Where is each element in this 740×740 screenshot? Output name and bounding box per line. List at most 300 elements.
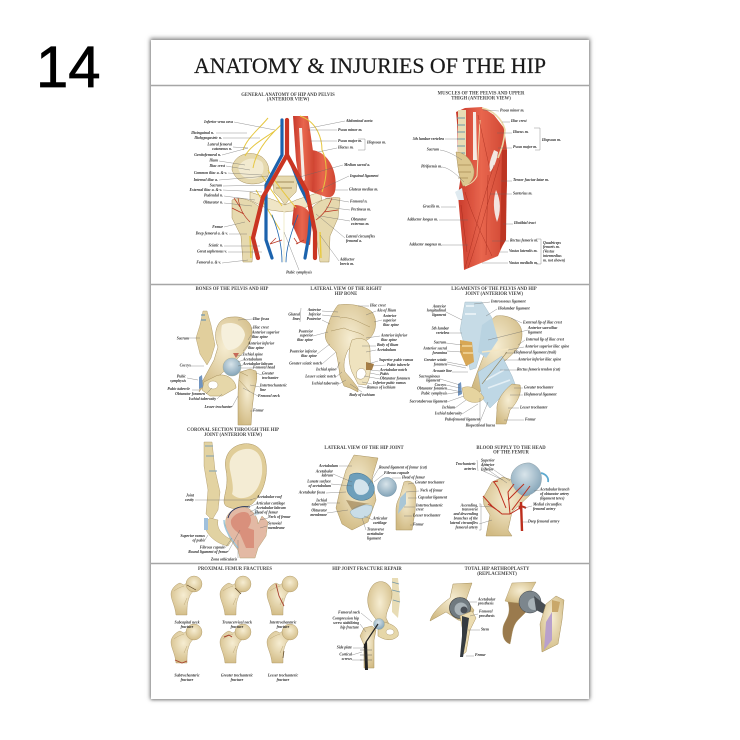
labels: general anatomy left: Femoral a. & v. [196, 260, 221, 264]
illustration: implanted hip prosthesis [430, 583, 476, 657]
leader lines: hip bone [300, 306, 386, 392]
labels: muscles left: Piriformis m. [421, 164, 442, 168]
labels: general anatomy right: Abdominal aorta [345, 119, 373, 123]
labels: fracture types: Greater trochanteric [221, 674, 253, 678]
labels: coronal: Round ligament of femur [188, 550, 229, 554]
labels: blood supply: arteries [464, 467, 477, 471]
heading: blood supply: BLOOD SUPPLY TO THE HEAD [476, 446, 546, 451]
labels: general anatomy left: Ilium [208, 158, 218, 162]
heading: bones: BONES OF THE PELVIS AND HIP [196, 287, 268, 292]
labels: ligaments left: Obturator foramen [417, 386, 447, 390]
labels: hip bone right: iliac spine [383, 323, 399, 327]
labels: lateral view right: Articular [372, 516, 388, 520]
femur: lesser trochanteric fracture [267, 624, 298, 663]
labels: bones right: trochanter [262, 376, 279, 380]
labels: general anatomy right: Pectineus m. [351, 208, 371, 212]
labels: muscles right: m. not shown) [543, 258, 566, 262]
labels: hip bone right: Body of ischium [348, 393, 375, 397]
labels: bones left [167, 336, 233, 409]
labels: lateral view left: Acetabulum [318, 464, 338, 468]
panel: blood supply to the head of the femur [450, 446, 569, 536]
labels: muscles left: 5th lumbar vertebra [413, 137, 444, 141]
labels: general anatomy left: Sciatic n. [208, 244, 223, 248]
labels: fracture types: Transcervical neck [222, 620, 252, 624]
labels: hip bone right: Obturator foramen [380, 376, 410, 380]
labels: muscles right: Iliopsoas m. [541, 138, 561, 142]
labels: bones left: Lesser trochanter [203, 405, 233, 409]
labels: ligaments right: ligament [528, 330, 543, 334]
femur: intertrochanteric fracture [267, 576, 298, 615]
labels: lateral view left: of acetabulum [309, 484, 331, 488]
labels: blood supply: Trochanteric [456, 462, 476, 466]
labels: coronal: membrane [268, 526, 285, 530]
labels: coronal: Head of femur [254, 510, 279, 514]
labels: bones right: iliac spine [252, 335, 268, 339]
labels: bones right: Iliac crest [252, 326, 269, 330]
labels: blood supply: Inferior [480, 468, 494, 472]
labels: muscles right: Iliacus m. [512, 130, 529, 134]
labels: lateral view left: Obturator [311, 508, 328, 512]
labels: lateral view right: Fibrous capsule [384, 471, 410, 475]
labels: general anatomy left: Internal iliac a. [193, 178, 218, 182]
labels: blood supply [450, 458, 569, 530]
labels: ligaments right: Rectus femoris tendon (cut) [517, 368, 561, 372]
labels: blood supply: (ligament teres) [540, 496, 565, 500]
labels: ligaments right: Anterior superior iliac spine [524, 344, 570, 348]
panel: coronal section through the hip joint [180, 428, 291, 562]
labels: ligaments left: Iliopectineal bursa [465, 424, 495, 428]
labels: repair: Side plate [337, 646, 352, 650]
leader lines: ligaments [440, 302, 528, 424]
illustration: pelvis and femur bones [196, 311, 257, 425]
labels: lateral view right: ligament [367, 536, 382, 540]
labels: hip bone left: Posterior inferior [290, 350, 318, 354]
labels: lateral view right: crest [416, 508, 424, 512]
labels: hip bone left: Inferior [308, 312, 322, 316]
leader lines: bones [187, 319, 262, 411]
labels: fracture types: Subcapital neck [174, 620, 200, 624]
panel: general anatomy of hip and pelvis [188, 93, 386, 274]
femur: subcapital neck fracture [171, 576, 202, 615]
labels: ligaments left: Coccyx [435, 383, 446, 387]
labels: hip bone left: Gluteal [288, 312, 301, 316]
labels: general anatomy right: femoral a. [346, 239, 362, 243]
labels: coronal: Synovial [268, 522, 282, 526]
labels: bones right [242, 317, 287, 412]
labels: arthroplasty [475, 598, 496, 657]
labels: hip bone left: Ischial tuberosity [311, 382, 339, 386]
labels: bones right: Acetabulum [242, 358, 262, 362]
labels: hip bone left: iliac spine [297, 338, 313, 342]
labels: hip bone right: iliac spine [381, 338, 397, 342]
labels: ligaments left: longitudinal [427, 308, 447, 312]
labels: hip bone right: Iliac crest [369, 304, 386, 308]
panel: lateral view of the right hip bone [288, 287, 414, 397]
labels: ligaments right: Femur [525, 418, 536, 422]
panel: lateral view of the hip joint [298, 446, 448, 540]
labels: muscles right: Psoas major m. [513, 145, 537, 149]
labels: ligaments right: Iliofemoral ligament [523, 392, 557, 396]
labels: ligaments left: Sacrospinous [419, 374, 441, 378]
leader lines: arthroplasty [466, 602, 480, 656]
labels: bones right: Femur [253, 408, 264, 412]
labels: blood supply: Anterior [480, 463, 495, 467]
labels: hip bone right: Inferior pubic ramus [372, 381, 406, 385]
femur: greater trochanteric fracture [220, 624, 251, 663]
leader lines: muscles [439, 110, 541, 264]
leader lines: blood supply [477, 460, 540, 530]
labels: ligaments left: ligament [426, 378, 441, 382]
labels: general anatomy left: Genitofemoral n. [194, 153, 221, 157]
labels: blood supply: Superior [481, 458, 495, 462]
labels: blood supply: branches of the [454, 516, 478, 520]
labels: lateral view right: acetabular [367, 532, 384, 536]
labels: bones right: Ischial spine [242, 352, 263, 356]
heading: fractures: PROXIMAL FEMUR FRACTURES [198, 567, 272, 572]
labels: muscles right [500, 108, 566, 265]
labels: general anatomy right: Lateral circumflex [345, 234, 375, 238]
labels: general anatomy left: cutaneous n. [212, 147, 232, 151]
labels: bones right: Iliac fossa [252, 317, 269, 321]
labels: general anatomy right: externus m. [351, 222, 369, 226]
labels: bones left: Coccyx [180, 364, 191, 368]
labels: muscles left: Adductor longus m. [406, 218, 438, 222]
labels: ligaments left: Arcuate line [432, 369, 452, 373]
labels: coronal: cavity [185, 498, 194, 502]
heading: fracture repair: HIP JOINT FRACTURE REPAIR [332, 567, 402, 572]
labels: lateral view right [367, 466, 448, 540]
labels: lateral view right: Round ligament of femur (cut) [379, 466, 428, 470]
illustration: hip ligaments [458, 302, 522, 424]
panel: hip joint fracture repair [332, 567, 402, 670]
labels: hip bone left: superior [299, 334, 314, 338]
labels: coronal: Articular cartilage [255, 502, 285, 506]
illustration: coronal hip section [204, 442, 268, 558]
labels: lateral view right: cartilage [373, 521, 387, 525]
labels: hip bone left: lines [293, 317, 301, 321]
labels: ligaments right: Internal lip of iliac crest [525, 338, 565, 342]
labels: bones right: Intertrochanteric [259, 384, 287, 388]
labels: ligaments right: Interosseous ligament [490, 300, 526, 304]
labels: coronal: Acetabular labrum [255, 506, 286, 510]
labels: bones right: Acetabular labrum [242, 362, 273, 366]
labels: blood supply: transverse [462, 508, 478, 512]
labels: general anatomy right: Median sacral a. [343, 163, 370, 167]
labels: arthroplasty: Femoral [479, 610, 493, 614]
illustration: right hip bone [325, 304, 376, 392]
labels: general anatomy left: Inferior vena cava [203, 120, 233, 124]
labels: lateral view left: membrane [310, 513, 327, 517]
illustration: opened hip joint [336, 455, 416, 530]
poster sheet [151, 40, 589, 699]
labels: ligaments right: Anterior inferior iliac spine [517, 358, 561, 362]
labels: muscles left [406, 137, 444, 246]
labels: blood supply: femoral artery [533, 507, 556, 511]
labels: general anatomy left: Obturator n. [203, 200, 223, 204]
labels: repair [332, 610, 360, 661]
labels: muscles right: Sartorius m. [513, 192, 532, 196]
labels: lateral view left: Acetabular [315, 470, 334, 474]
labels: bones right: Greater [262, 372, 275, 376]
labels: hip bone right: Body of ilium [376, 343, 398, 347]
labels: repair: Compression hip [333, 616, 359, 620]
labels: general anatomy left: Great saphenous v. [197, 250, 227, 254]
labels: general anatomy right: Adductor [339, 258, 355, 262]
labels: fracture types: fracture [277, 678, 290, 682]
labels: ligaments left: Ischial tuberosity [434, 412, 462, 416]
labels: coronal: Zona orbicularis [210, 558, 238, 562]
labels: hip bone right [348, 304, 414, 397]
labels: bones right: Femoral neck [258, 394, 280, 398]
labels: fracture types: fracture [277, 625, 290, 629]
number 14: 14 [36, 35, 101, 100]
labels: fracture types [174, 620, 298, 682]
labels: arthroplasty: Stem [481, 628, 489, 632]
labels: bones left: Pubic [177, 374, 186, 378]
labels: bones left: Sacrum [177, 336, 189, 340]
labels: general anatomy left: Femur [212, 225, 224, 229]
labels: lateral view right: Greater trochanter [415, 480, 445, 484]
labels: general anatomy left: Lateral femoral [206, 142, 233, 146]
illustration: pelvic vessels and nerves [232, 116, 340, 262]
labels: lateral view left: labrum [322, 474, 333, 478]
labels: blood supply: and descending [454, 512, 478, 516]
labels: bones left: Obturator foramen [175, 392, 205, 396]
labels: general anatomy left: Iliac crest [208, 164, 226, 168]
labels: bones right: iliac spine [248, 346, 264, 350]
labels: general anatomy right [286, 119, 386, 274]
labels: repair: hip fracture [340, 626, 359, 630]
labels: bones right: Anterior superior [251, 330, 280, 334]
leader lines: general anatomy [216, 121, 350, 270]
labels: ligaments left: Pubic symphysis [421, 392, 448, 396]
labels: coronal: Acetabular roof [256, 495, 283, 499]
labels: blood supply: lateral circumflex [450, 521, 478, 525]
labels: muscles right: intermedius [543, 254, 562, 258]
labels: ligaments left: Anterior sacral [422, 346, 448, 350]
labels: fracture types: fracture [231, 625, 244, 629]
labels: repair: Femoral neck [338, 610, 360, 614]
labels: general anatomy right: Obturator [351, 218, 367, 222]
labels: blood supply: Acetabular branch [539, 488, 569, 492]
labels: hip bone left: Posterior [307, 317, 322, 321]
labels: ligaments left: Ischium [441, 406, 455, 410]
labels: ligaments left [410, 304, 495, 428]
labels: muscles right: Iliac crest [510, 119, 527, 123]
labels: general anatomy right: Psoas minor m. [338, 128, 362, 132]
labels: ligaments left: Greater sciatic [424, 358, 447, 362]
labels: general anatomy left: Deep femoral a. & v. [195, 232, 228, 236]
labels: general anatomy left: External iliac a. & v. [188, 188, 222, 192]
labels: hip bone right: Pubis [380, 372, 389, 376]
labels: lateral view left: Acetabular fossa [298, 490, 325, 494]
labels: ligaments right: Iliolumbar ligament [497, 306, 530, 310]
heading: ligaments: LIGAMENTS OF THE PELVIS AND HIP [451, 287, 537, 292]
labels: hip bone left: iliac spine [301, 354, 317, 358]
heading: lateral view: LATERAL VIEW OF THE HIP JOINT [324, 446, 405, 451]
labels: general anatomy right: Femoral n. [350, 200, 368, 204]
labels: muscles left: Adductor magnus m. [408, 242, 442, 246]
labels: muscles left: Gracilis m. [423, 204, 440, 208]
leader lines: repair [352, 613, 372, 660]
illustration: femoral head arteries [483, 463, 548, 536]
labels: coronal [180, 494, 291, 562]
labels: blood supply: femoral artery [456, 526, 478, 530]
labels: arthroplasty: Femur [475, 653, 486, 657]
heading: coronal section: CORONAL SECTION THROUGH THE HIP [187, 428, 279, 433]
labels: ligaments right [490, 300, 570, 422]
labels: repair: screws [341, 657, 353, 661]
labels: muscles right: Rectus femoris m. [510, 238, 538, 242]
panel: proximal femur fractures [171, 567, 298, 682]
labels: fracture types: fracture [231, 678, 244, 682]
heading: muscles: MUSCLES OF THE PELVIS AND UPPER [438, 92, 524, 96]
labels: lateral view left [298, 464, 338, 517]
labels: ligaments left: 5th lumbar [432, 326, 450, 330]
illustration: thigh muscles [455, 107, 507, 270]
labels: blood supply: Deep femoral artery [527, 520, 560, 524]
labels: fracture types: fracture [181, 625, 194, 629]
labels: hip bone right: Ala of Ilium [376, 308, 396, 312]
labels: ligaments left: vertebra [436, 331, 449, 335]
labels: hip bone left: Lesser sciatic notch [304, 374, 336, 378]
labels: repair: Cortical [339, 652, 353, 656]
heading: general anatomy: GENERAL ANATOMY OF HIP AND PELVIS [241, 93, 335, 98]
labels: muscles left: Sacrum [427, 148, 439, 152]
labels: general anatomy right: Pubic symphysis [286, 270, 312, 274]
leader lines: coronal [195, 498, 268, 558]
labels: hip bone right: Anterior [382, 314, 397, 318]
labels: arthroplasty: prosthesis [477, 602, 494, 606]
labels: coronal: of pubis [192, 538, 206, 542]
heading: general anatomy: (ANTERIOR VIEW) [267, 98, 310, 103]
labels: ligaments left: foramen [434, 362, 447, 366]
labels: arthroplasty: Acetabular [477, 598, 496, 602]
labels: general anatomy right: Iliopsoas m. [366, 140, 386, 144]
labels: ligaments right: Iliofemoral ligament (trail) [513, 350, 557, 354]
labels: ligaments right: Lesser trochanter [519, 406, 548, 410]
labels: lateral view right: Neck of femur [419, 488, 443, 492]
labels: hip bone left [288, 308, 339, 386]
labels: fracture types: Subtrochanteric [174, 674, 200, 678]
labels: lateral view left: Ischial [315, 498, 328, 502]
labels: arthroplasty: prosthesis [478, 614, 495, 618]
labels: ligaments right: Anterior sacroiliac [527, 326, 558, 330]
labels: hip bone right: Acetabulum [376, 348, 396, 352]
labels: ligaments left: ligament [432, 313, 447, 317]
panel: muscles of the pelvis and upper thigh [406, 92, 566, 270]
panel: ligaments of the pelvis and hip joint [410, 287, 570, 428]
labels: muscles right: Vastus medialis m. [509, 261, 538, 265]
heading: ligaments: JOINT (ANTERIOR VIEW) [465, 292, 523, 297]
labels: general anatomy left: Iliohypogastric n. [193, 136, 222, 140]
labels: bones left: Pubic tubercle [167, 387, 190, 391]
labels: hip bone left: Posterior [299, 330, 314, 334]
femur: transcervical neck fracture [220, 576, 251, 615]
labels: bones left: Ischial tuberosity [188, 397, 216, 401]
labels: general anatomy right: Psoas major m. [338, 139, 362, 143]
heading: blood supply: OF THE FEMUR [493, 451, 529, 456]
labels: muscles right: Vastus lateralis m. [509, 249, 538, 253]
labels: bones right: Femoral head [253, 366, 275, 370]
labels: lateral view right: Head of femur [401, 476, 426, 480]
labels: muscles right: Tensor fasciae latae m. [513, 178, 549, 182]
labels: bones right: line [260, 388, 266, 392]
labels: general anatomy left: Ilioinguinal n. [190, 131, 214, 135]
labels: hip bone right: Acetabular notch [379, 368, 407, 372]
labels: muscles right: Psoas minor m. [500, 108, 524, 112]
labels: blood supply: Ascending, [460, 504, 478, 508]
heading: coronal section: JOINT (ANTERIOR VIEW) [204, 433, 262, 438]
labels: lateral view right: Lesser trochanter [412, 514, 441, 518]
labels: fracture types: fracture [181, 678, 194, 682]
panel: total hip arthroplasty [430, 567, 564, 657]
labels: general anatomy right: Inguinal ligament [349, 174, 379, 178]
labels: general anatomy right: brevis m. [340, 262, 354, 266]
panel: bones of the pelvis and hip [167, 287, 287, 425]
labels: hip bone left: Anterior [307, 308, 322, 312]
labels: fracture types: Intertrochanteric [269, 620, 297, 624]
labels: lateral view right: Capsular ligament [418, 496, 448, 500]
labels: coronal: Neck of femur [267, 515, 291, 519]
labels: ligaments left: Sacrum [434, 340, 446, 344]
labels: muscles right: (Vastus [543, 250, 555, 254]
labels: blood supply: of obturator artery [540, 492, 569, 496]
labels: ligaments left: Anterior [432, 304, 447, 308]
labels: muscles right: femoris m. [543, 245, 560, 249]
labels: general anatomy right: Gluteus medius m. [349, 188, 378, 192]
labels: repair: screw stabilizing [332, 621, 359, 625]
labels: lateral view right: Intertrochanteric [415, 504, 443, 508]
labels: lateral view right: Femur [413, 522, 424, 526]
labels: fracture types: Lesser trochanteric [268, 674, 298, 678]
labels: ligaments left: foramina [432, 351, 447, 355]
labels: hip bone right: Superior pubic ramus [379, 358, 414, 362]
labels: ligaments left: Sacrotuberous ligament [410, 400, 448, 404]
leader lines: lateral view [326, 466, 419, 530]
labels: hip bone left: Greater sciatic notch [289, 362, 322, 366]
labels: hip bone right: Pubic tubercle [387, 363, 410, 367]
labels: hip bone left: Ischial spine [315, 368, 336, 372]
heading: hip bone: HIP BONE [335, 292, 357, 297]
labels: general anatomy left: Common iliac a. & v. [194, 171, 227, 175]
labels: ligaments left: Pubofemoral ligament [445, 418, 481, 422]
title: ANATOMY & INJURIES OF THE HIP [194, 53, 546, 78]
labels: muscles right: Quadriceps [543, 241, 561, 245]
labels: bones right: Anterior inferior [247, 342, 275, 346]
labels: general anatomy left: Pudendal n. [204, 194, 223, 198]
labels: general anatomy left: Sacrum [210, 184, 222, 188]
labels: lateral view left: tuberosity [312, 502, 327, 506]
heading: hip bone: LATERAL VIEW OF THE RIGHT [310, 287, 382, 292]
heading: muscles: THIGH (ANTERIOR VIEW) [451, 96, 511, 101]
labels: general anatomy left [188, 120, 233, 264]
labels: bones left: symphysis [169, 379, 187, 383]
labels: blood supply: Medial circumflex [532, 502, 562, 506]
illustration: separated hip prosthesis [503, 582, 564, 652]
labels: hip bone right: Ramus of ischium [367, 386, 396, 390]
labels: hip bone right: Anterior inferior [380, 334, 408, 338]
heading: arthroplasty: (REPLACEMENT) [477, 572, 517, 577]
labels: lateral view left: Lunate surface [306, 480, 331, 484]
labels: muscles right: Iliotibial tract [513, 221, 537, 225]
labels: lateral view right: Transverse [367, 528, 384, 532]
labels: ligaments right: Greater trochanter [524, 386, 554, 390]
labels: coronal: Fibrous capsule [200, 546, 225, 550]
heading: arthroplasty: TOTAL HIP ARTHROPLASTY [465, 567, 529, 572]
femur: subtrochanteric fracture [171, 624, 202, 663]
labels: hip bone right: superior [382, 318, 397, 322]
